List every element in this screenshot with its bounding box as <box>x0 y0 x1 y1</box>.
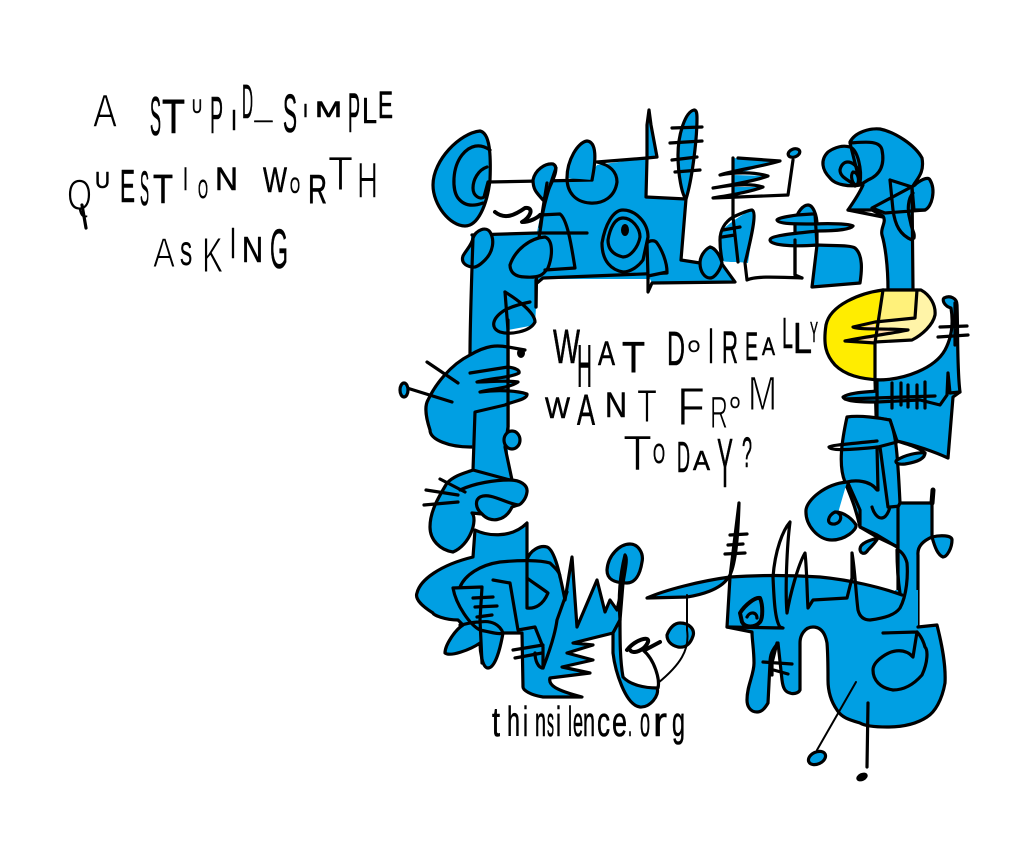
website credit: thinsilence.org: t <box>492 698 500 745</box>
title: a stupid-simple question worth asking: I <box>303 101 308 121</box>
title: a stupid-simple question worth asking: G <box>270 217 288 280</box>
title: a stupid-simple question worth asking: A <box>93 85 117 137</box>
website credit: thinsilence.org: i <box>523 698 528 745</box>
question: what do I really want from today?: A <box>693 445 710 476</box>
title: a stupid-simple question worth asking: T <box>328 148 353 201</box>
top band: lower edge, target and bell <box>472 210 667 283</box>
question: what do I really want from today?: F <box>677 377 705 437</box>
title: a stupid-simple question worth asking: S <box>150 85 161 147</box>
title: a stupid-simple question worth asking: _ <box>253 101 273 123</box>
top left: ear shape <box>433 131 592 226</box>
website credit: thinsilence.org: n <box>535 698 546 745</box>
website credit: thinsilence.org: e <box>612 698 627 745</box>
title: a stupid-simple question worth asking: D <box>242 76 253 129</box>
title: a stupid-simple question worth asking: A <box>153 229 175 276</box>
title: a stupid-simple question worth asking: I <box>230 219 236 268</box>
title: a stupid-simple question worth asking: H <box>357 152 378 209</box>
bottom right: body with spikes <box>727 522 945 783</box>
title: a stupid-simple question worth asking: N <box>242 229 263 270</box>
question: what do I really want from today?: H <box>577 333 592 400</box>
question: what do I really want from today?: T <box>637 380 657 432</box>
website credit: thinsilence.org: h <box>507 698 520 745</box>
illustration: blue doodle frame <box>400 110 968 783</box>
website credit: thinsilence.org: i <box>556 698 561 745</box>
website credit: thinsilence.org: n <box>583 698 595 745</box>
title: a stupid-simple question worth asking: E <box>378 85 393 127</box>
title: a stupid-simple question worth asking: L <box>362 90 377 131</box>
question: what do I really want from today?: Y <box>717 424 733 502</box>
title: a stupid-simple question worth asking: W <box>263 161 287 200</box>
title: a stupid-simple question worth asking: P <box>210 87 223 145</box>
title: a stupid-simple question worth asking: K <box>202 229 223 283</box>
title: a stupid-simple question worth asking: R <box>308 166 327 212</box>
question: what do I really want from today?: N <box>605 386 627 425</box>
website credit: thinsilence.org: s <box>547 698 554 745</box>
question: what do I really want from today?: T <box>622 333 645 382</box>
title: a stupid-simple question worth asking: T <box>162 91 185 144</box>
title: a stupid-simple question worth asking: T <box>153 166 173 212</box>
title: a stupid-simple question worth asking: S <box>140 163 149 216</box>
right column: blue body and ticks <box>843 297 968 458</box>
title: a stupid-simple question worth asking <box>67 76 393 283</box>
top right: head with circle and star <box>823 129 933 290</box>
question: what do I really want from today?: W <box>545 392 571 425</box>
question: what do I really want from today?: I <box>708 318 714 374</box>
website credit: thinsilence.org: e <box>573 698 583 745</box>
title: a stupid-simple question worth asking: S <box>180 236 192 272</box>
question: what do I really want from today?: ? <box>742 429 752 477</box>
question: what do I really want from today?: E <box>745 325 758 369</box>
yellow highlight shape <box>825 290 943 447</box>
title: a stupid-simple question worth asking: P <box>348 81 360 144</box>
question: what do I really want from today?: O <box>730 395 740 412</box>
question: what do I really want from today?: T <box>623 425 652 481</box>
title: a stupid-simple question worth asking: E <box>120 160 135 212</box>
website credit: thinsilence.org <box>492 698 685 745</box>
question: what do I really want from today?: M <box>748 368 777 421</box>
website credit: thinsilence.org: . <box>628 698 632 745</box>
question: what do I really want from today?: A <box>598 335 615 373</box>
frame base fill: top band and left column <box>470 158 735 480</box>
title: a stupid-simple question worth asking: S <box>283 84 297 144</box>
title: a stupid-simple question worth asking: U <box>192 97 202 118</box>
question: what do I really want from today?: W <box>553 321 580 374</box>
question: what do I really want from today?: L <box>782 309 793 358</box>
top right: winged figure <box>770 205 861 287</box>
title: a stupid-simple question worth asking: I <box>183 161 188 197</box>
website credit: thinsilence.org: g <box>672 698 685 745</box>
infographic canvas: Y <box>810 317 818 349</box>
title: a stupid-simple question worth asking: Q <box>67 171 92 220</box>
top centre: spike and ticked leaf <box>646 110 735 292</box>
question: what do I really want from today?: D <box>677 433 690 482</box>
question: what do I really want from today?: O <box>653 438 665 469</box>
top centre: bumps, loop and squiggle <box>495 141 647 307</box>
top right: flag with lollipop <box>700 147 802 280</box>
question: what do I really want from today?: A <box>762 333 775 361</box>
bottom left: body with spikes <box>417 523 658 707</box>
question: what do I really want from today? <box>545 309 818 502</box>
question: what do I really want from today?: R <box>710 387 728 438</box>
bottom centre: ticked stem and leaf <box>627 503 747 688</box>
title: a stupid-simple question worth asking: I <box>231 105 237 137</box>
right column: box, hat and spiral <box>806 416 952 628</box>
title: a stupid-simple question worth asking: M <box>315 97 342 122</box>
left column: lower lobes <box>424 470 527 552</box>
title: a stupid-simple question worth asking: O <box>198 174 208 204</box>
title: a stupid-simple question worth asking: U <box>95 167 110 193</box>
left column: bulge with fork and lollipop <box>400 320 527 480</box>
title: a stupid-simple question worth asking: O <box>290 173 300 198</box>
question: what do I really want from today?: R <box>722 322 738 373</box>
website credit: thinsilence.org: l <box>568 698 572 745</box>
website credit: thinsilence.org: c <box>597 698 610 745</box>
website credit: thinsilence.org: r <box>653 698 667 745</box>
question: what do I really want from today?: L <box>793 314 812 363</box>
question: what do I really want from today?: O <box>688 337 700 356</box>
website credit: thinsilence.org: o <box>640 698 650 745</box>
top left: column loops <box>462 229 536 427</box>
question: what do I really want from today?: D <box>667 323 685 376</box>
question: what do I really want from today?: A <box>577 386 595 435</box>
title: a stupid-simple question worth asking: N <box>215 161 238 197</box>
